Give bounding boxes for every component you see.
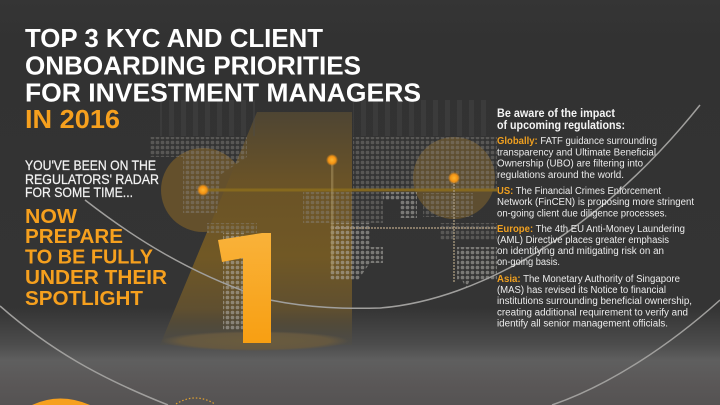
text block: globally: transparency and Ultimate Beneficial xyxy=(497,148,656,158)
text block: US: Network (FinCEN) is proposing more stringent xyxy=(497,197,694,208)
text block: Asia: Asia: The Monetary Authority of Singapore xyxy=(497,274,681,285)
regulations heading: of upcoming regulations: xyxy=(497,120,625,132)
regulations heading: Be aware of the impact xyxy=(497,108,615,120)
text block: Asia: (MAS) has revised its Notice to financial xyxy=(497,285,666,296)
spotlight: left circle xyxy=(161,148,245,232)
spotlight: right circle xyxy=(413,137,495,219)
text block: US: US: The Financial Crimes Enforcement xyxy=(497,186,661,197)
stage ellipse under number xyxy=(161,331,349,351)
text block: Europe: on identifying and mitigating risk on an xyxy=(497,246,664,257)
map: europe and north africa xyxy=(303,192,383,223)
map: north america xyxy=(150,137,247,213)
map: southeast asia xyxy=(440,223,497,240)
marker: centre xyxy=(326,154,338,166)
title xyxy=(25,25,421,134)
text block: Asia: identify all senior management officials. xyxy=(497,318,668,330)
text block: Asia: institutions surrounding beneficial ownership, xyxy=(497,296,692,307)
text block: Europe: Europe: The 4th EU Anti-Money Laundering xyxy=(497,224,685,235)
subheading: FOR SOME TIME... xyxy=(25,184,133,200)
orange callout: NOW xyxy=(25,205,78,228)
world map of dots xyxy=(150,100,497,330)
curved arcs xyxy=(0,105,720,405)
marker: right xyxy=(448,172,460,184)
text block: Europe: (AML) Directive places greater emphasis xyxy=(497,235,669,246)
map: australia xyxy=(457,247,497,288)
map: central america xyxy=(207,223,257,233)
arc: upper sweep xyxy=(85,105,700,308)
line: lower horizontal xyxy=(332,227,497,229)
title: IN 2016 xyxy=(25,106,120,134)
text block: globally xyxy=(497,136,657,181)
text block: US: on-going client due diligence processes. xyxy=(497,208,667,220)
line: right vertical xyxy=(453,178,455,282)
regulations panel xyxy=(497,108,694,330)
large number 1 xyxy=(218,233,271,343)
next section: dotted arc xyxy=(176,398,215,404)
map: northern streaks xyxy=(160,100,255,136)
map: india and china xyxy=(423,193,473,217)
map: africa xyxy=(330,223,383,280)
map: northern streaks right xyxy=(353,100,493,136)
text block: Europe xyxy=(497,224,685,268)
text block: Europe: on-going basis. xyxy=(497,257,560,268)
text block: Asia xyxy=(497,274,692,330)
line: central vertical xyxy=(331,160,333,272)
subheading: REGULATORS' RADAR xyxy=(25,171,159,187)
text block: Asia: creating additional requirement to verify and xyxy=(497,308,688,318)
orange callout: PREPARE xyxy=(25,225,123,248)
orange callout: TO BE FULLY xyxy=(25,246,153,268)
title: FOR INVESTMENT MANAGERS xyxy=(25,80,421,108)
map: asia xyxy=(353,137,497,190)
title: ONBOARDING PRIORITIES xyxy=(25,52,361,80)
map: south america xyxy=(223,233,244,330)
next section: orange blob xyxy=(32,398,90,405)
title: TOP 3 KYC AND CLIENT xyxy=(25,25,323,53)
spotlight beams xyxy=(160,112,495,345)
marker: left xyxy=(197,184,209,196)
orange callout xyxy=(25,205,167,310)
orange callout: SPOTLIGHT xyxy=(25,287,143,310)
arc: lower left xyxy=(0,306,168,405)
connector lines xyxy=(203,160,497,282)
location markers xyxy=(197,154,460,196)
subheading: YOU'VE BEEN ON THE xyxy=(25,157,156,173)
text block: globally: regulations around the world. xyxy=(497,170,624,181)
text block: globally: Ownership (UBO) are filtering into xyxy=(497,158,644,170)
spotlight: central beam xyxy=(160,112,352,345)
subheading xyxy=(25,157,159,200)
line: upper horizontal xyxy=(203,188,497,192)
orange callout: UNDER THEIR xyxy=(25,266,167,289)
text block: globally: Globally: FATF guidance surrounding xyxy=(497,136,657,147)
text block: US xyxy=(497,186,694,220)
regulations heading xyxy=(497,108,625,132)
arc: lower right xyxy=(552,300,720,405)
map: middle asia xyxy=(383,192,417,218)
